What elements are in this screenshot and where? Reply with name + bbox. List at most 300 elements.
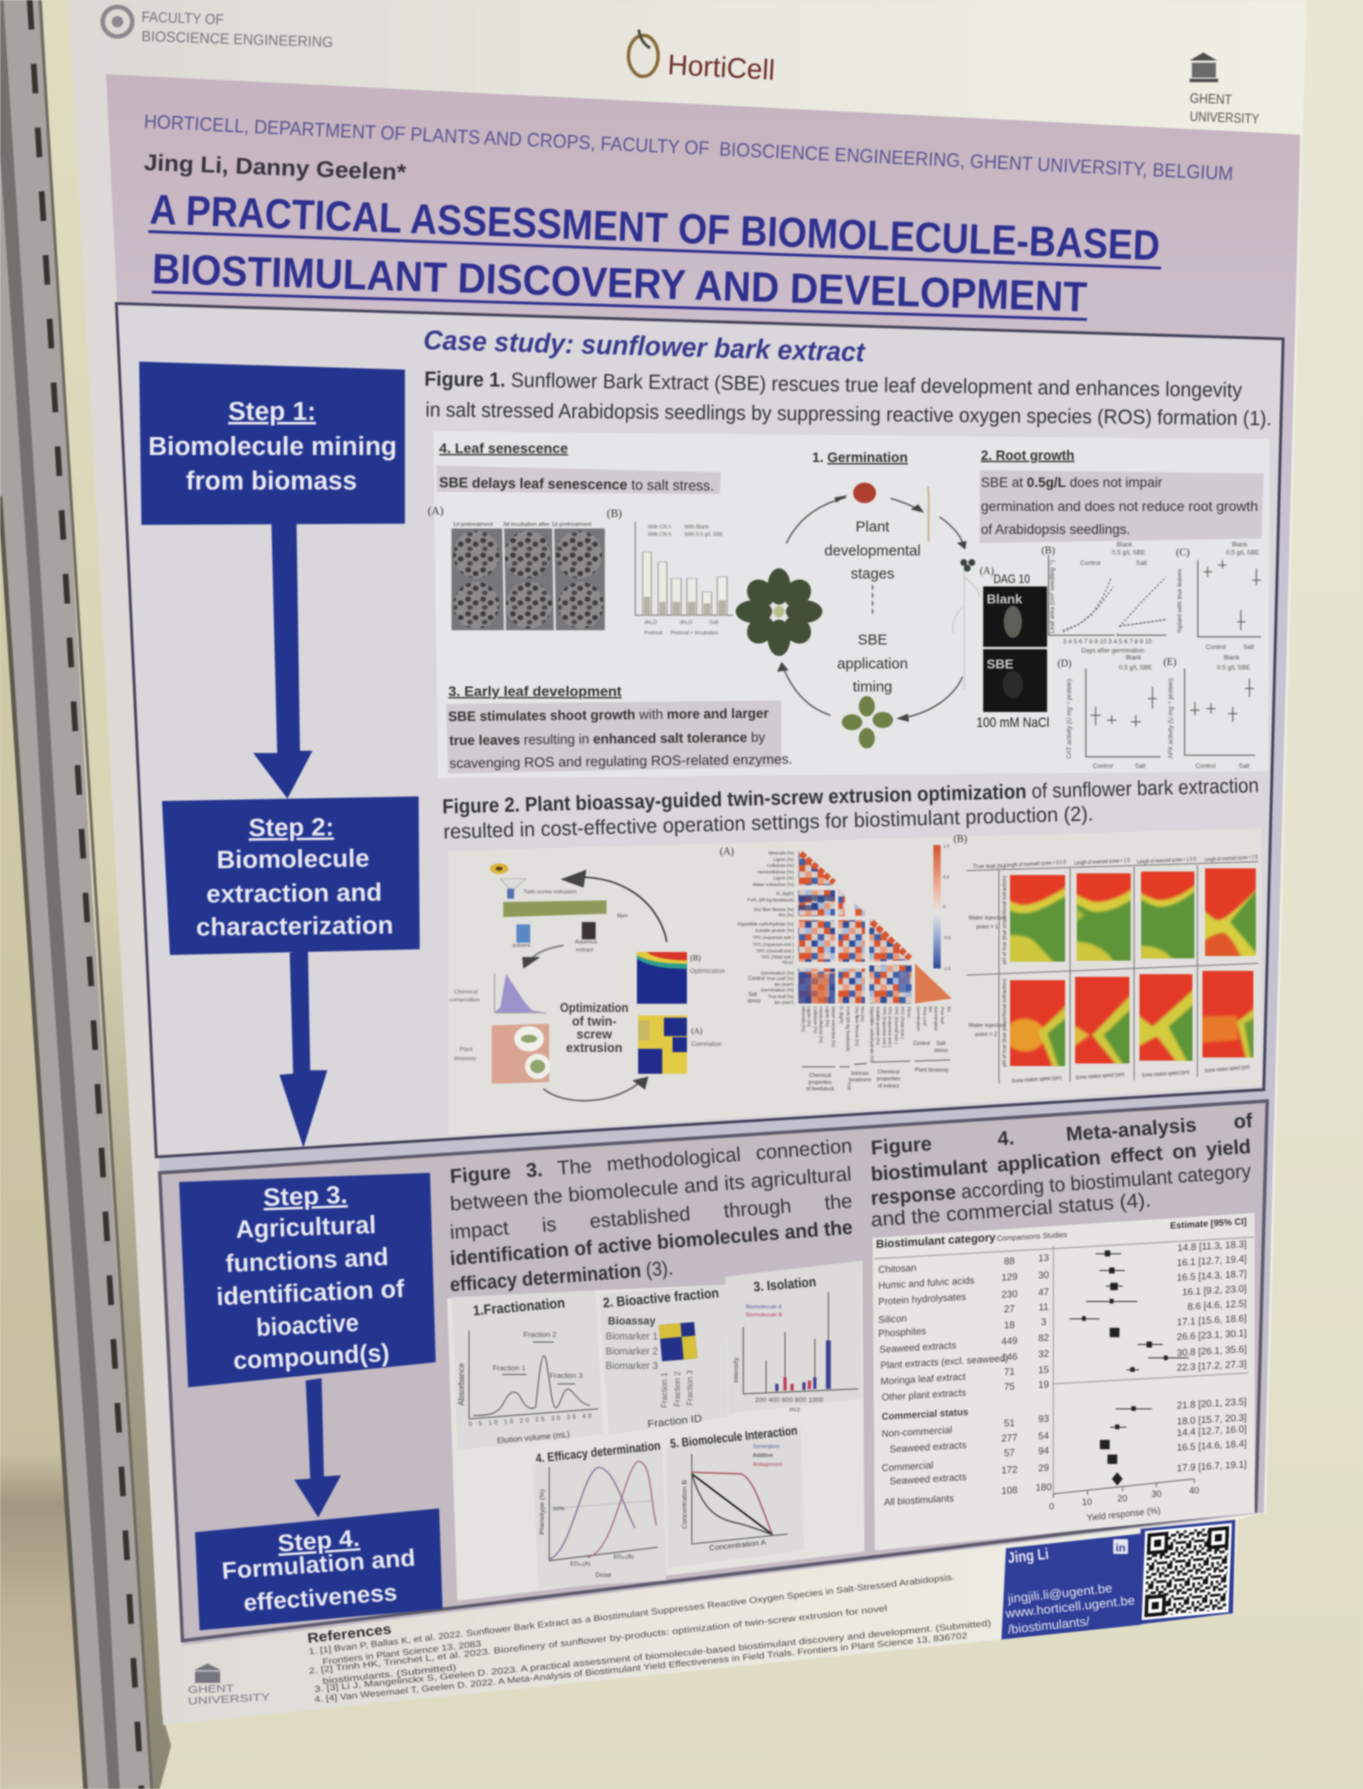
- chart: response surface heatmaps: Length of reversed screw = 1.5 D: [1137, 857, 1196, 866]
- column labels: TFC (Total extr.): [900, 1006, 905, 1039]
- card 3: isolation: Biomolecule B: [746, 1313, 782, 1319]
- column labels: FVR (t/h kg feedstock): [845, 1006, 850, 1052]
- cycle arrows: [777, 487, 980, 722]
- poster stand metal bar: [0, 0, 171, 1789]
- studies column: 29: [1038, 1463, 1049, 1474]
- figure 1 caption: [424, 368, 1272, 430]
- estimates column: 16.1 [12.7, 19.4]: [1177, 1254, 1247, 1269]
- section 2: root growth: 0.5 g/L SBE: [1112, 549, 1145, 556]
- section 4: leaf senescence: SBE delays leaf senescence to salt stress.: [439, 475, 714, 495]
- column labels: TPC (Aqueous extr.): [882, 1006, 887, 1048]
- section 2: root growth: Control: [1080, 560, 1100, 567]
- figure 4 caption: [870, 1110, 1254, 1232]
- card 1: fractionation: Fraction 2: [524, 1330, 556, 1339]
- title: BIOSTIMULANT DISCOVERY AND DEVELOPMENT: [151, 245, 1088, 321]
- card 5: biomolecule interaction: Additive: [753, 1453, 773, 1459]
- section 2: root growth: CAT activity (U mg⁻¹ protein): [1066, 679, 1073, 759]
- section 4: leaf senescence: Blank: [518, 529, 532, 535]
- card 2: bioactive fraction: Fraction ID: [647, 1414, 703, 1430]
- row labels: Digestible carbohydrate (%): [738, 921, 794, 926]
- logo: Faculty of Bioscience Engineering: [103, 7, 333, 51]
- section 4: leaf senescence: 100 mM NaCl: [559, 529, 594, 535]
- category names: Silicon: [878, 1313, 907, 1326]
- chart: correlation matrix: -0.5: [943, 935, 951, 940]
- twin-screw extrusion diagram: bioassay: [454, 1056, 477, 1062]
- step 2 box: Step 2:: [248, 813, 334, 842]
- section 2: root growth: 0.5 g/L SBE: [1226, 549, 1259, 556]
- chart: response surface heatmaps: point = 2: [975, 1032, 997, 1038]
- footer logo: Ghent University: [188, 1663, 271, 1708]
- contact box: [1001, 1533, 1143, 1640]
- figure 4 caption: biostimulant application effect on yield: [870, 1136, 1252, 1186]
- step 4 box: effectiveness: [243, 1579, 398, 1617]
- chart: response surface heatmaps: Length of reversed screw = 0.5 D: [1005, 860, 1066, 869]
- studies column: 54: [1038, 1431, 1050, 1442]
- studies column: 93: [1038, 1414, 1049, 1425]
- footer logo: Ghent University: UNIVERSITY: [188, 1692, 271, 1708]
- references: References: [307, 1621, 393, 1646]
- category names: Chitosan: [878, 1263, 916, 1276]
- section 2: root growth: Blank: [1224, 654, 1240, 661]
- frame lines: [967, 862, 1258, 1083]
- chart: correlation matrix: 0: [943, 904, 946, 909]
- row labels: Germination (%): [761, 987, 794, 992]
- studies column: 82: [1038, 1333, 1049, 1344]
- row labels: BA (mm²): [775, 1000, 794, 1005]
- comparisons column: 75: [1004, 1381, 1015, 1393]
- step 3 box: Step 3.: [263, 1181, 348, 1212]
- step 3 box: functions and: [225, 1243, 389, 1278]
- card 3: isolation: m/z: [789, 1406, 801, 1413]
- column labels: Germination: [934, 1006, 939, 1032]
- center: plant developmental cycle: 1. Germination: [812, 450, 908, 465]
- chart: correlation matrix: Control: [913, 1041, 930, 1047]
- section 2: root growth: SBE at 0.5g/L does not impair: [981, 475, 1163, 490]
- section 4: leaf senescence: (A): [428, 506, 444, 518]
- row labels: TFC (Total extr.): [761, 954, 794, 959]
- chart: correlation matrix: 1.0: [943, 844, 950, 849]
- chart: response surface heatmaps: Length of reversed screw = 2 D: [1204, 855, 1258, 863]
- section 2: root growth: 0.5 g/L SBE: [1217, 665, 1250, 672]
- twin-screw extrusion diagram: [449, 863, 725, 1101]
- figure 4 caption: and the commercial status (4).: [870, 1189, 1152, 1232]
- twin-screw extrusion diagram: Correlation: [691, 1041, 722, 1048]
- estimates column: 16.1 [9.2, 23.0]: [1182, 1284, 1247, 1298]
- category names: Seaweed extracts: [890, 1472, 967, 1487]
- column labels: Hemicellulose (%): [819, 1006, 824, 1043]
- references: 2. [2] Trinh HK, Trinchet L, et al. 2023. Biorefinery of sunflower by-products: optimization of twin-screw extrusion for novel: [308, 1603, 888, 1676]
- section 3: early leaf development: true leaves resulting in enhanced salt tolerance by: [449, 730, 765, 748]
- center: plant developmental cycle: SBE: [858, 633, 887, 649]
- column labels: Soluble protein (%): [876, 1006, 881, 1045]
- bar chart: CAT activity: [635, 522, 733, 615]
- section 4: leaf senescence: 3d incubation after 1d pretreatment: [503, 522, 592, 528]
- category names: Seaweed extracts: [879, 1340, 956, 1356]
- chart: response surface heatmaps: Screw rotation speed (rpm): [1141, 1070, 1190, 1079]
- estimates column: 26.6 [23.1, 30.1]: [1177, 1328, 1247, 1343]
- row labels: Lignin (%): [773, 876, 794, 881]
- chart: response surface heatmaps: Water injection: [968, 1023, 1006, 1029]
- column labels: Rm (%): [860, 1006, 865, 1022]
- estimates column: 18.0 [15.7, 20.3]: [1177, 1413, 1247, 1428]
- section 2: root growth: 3 4 5 6 7 8 9 10 3 4 5 6 7 8 9 10: [1063, 638, 1152, 645]
- step 3 box: Agricultural: [235, 1211, 377, 1244]
- card 1: fractionation: Absorbance: [457, 1363, 466, 1406]
- cards: [452, 1261, 861, 1588]
- section 2: root growth: 100 mM NaCl: [976, 715, 1049, 730]
- chart: response surface heatmaps: Water injection: [968, 916, 1006, 922]
- icon: LinkedIn: in: [1115, 1543, 1126, 1555]
- photo panels: blank and SBE: Blank: [987, 592, 1023, 607]
- twin-screw extrusion diagram: fiber: [617, 913, 628, 919]
- section 2: root growth: DAG 10: [993, 572, 1030, 586]
- header logos: [103, 7, 1260, 126]
- section 2: root growth: (E): [1163, 657, 1176, 668]
- chart: correlation matrix: [720, 844, 952, 1093]
- chart: correlation matrix: of extract: [878, 1083, 900, 1089]
- category names: Plant extracts (excl. seaweed): [881, 1353, 1008, 1372]
- twin-screw extrusion diagram: composition: [449, 998, 480, 1004]
- figure 4 panel: forest plot: [873, 1213, 1255, 1551]
- photo grid of seedlings: [452, 528, 605, 630]
- figure 3 caption: efficacy determination (3).: [449, 1257, 674, 1297]
- references: 3. [3] Li J, Mangelinckx S, Geelen D. 2023. A practical assessment of biomolecule-based biostimulant discovery and development. (Submitted): [314, 1618, 992, 1694]
- card 5: biomolecule interaction: Concentration B: [682, 1479, 689, 1529]
- section 4: leaf senescence: dH₂O: [644, 620, 657, 626]
- step 2 box: characterization: [196, 912, 394, 942]
- references: Frontiers in Plant Science 13, 2083: [322, 1638, 482, 1667]
- card 5: biomolecule interaction: Antagonism: [753, 1462, 783, 1468]
- comparisons column: 230: [1001, 1289, 1018, 1301]
- photo panels: blank and SBE: SBE: [987, 657, 1014, 672]
- card 2: bioactive fraction: Biomarker 1: [606, 1331, 658, 1342]
- twin-screw extrusion diagram: Optimization: [690, 968, 725, 975]
- chart: correlation matrix: stress: [934, 1048, 948, 1054]
- comparisons column: 449: [1001, 1336, 1017, 1348]
- twin-screw extrusion diagram: solvent: [512, 943, 531, 949]
- center: plant developmental cycle: [736, 450, 980, 748]
- seedling: [927, 487, 930, 542]
- comparisons column: 146: [1001, 1352, 1017, 1364]
- category names: Commercial status: [882, 1407, 968, 1423]
- chart: response surface heatmaps: pH of true (true proportional extraction): [1002, 978, 1008, 1067]
- card 2: bioactive fraction: Fraction 3: [685, 1370, 694, 1406]
- card 5: biomolecule interaction: Concentration A: [709, 1538, 766, 1553]
- figure 2 caption: [442, 774, 1259, 844]
- center: plant developmental cycle: developmental: [824, 544, 921, 560]
- mauve poster background: [106, 74, 1300, 1645]
- estimates column: 21.8 [20.1, 23.5]: [1177, 1397, 1247, 1412]
- column labels: Water extractive (%): [831, 1006, 836, 1048]
- card 3: isolation: 200 400 600 800 1000: [755, 1397, 824, 1404]
- card 1: fractionation: 0 5 10 15 20 25 30 35 40: [468, 1413, 592, 1428]
- section 3: early leaf development: 3. Early leaf development: [448, 684, 622, 699]
- axis labels: 30: [1151, 1489, 1162, 1499]
- section 2: root growth: of Arabidopsis seedlings.: [981, 522, 1130, 537]
- twin-screw extrusion diagram: of twin-: [572, 1015, 617, 1029]
- figure 2 caption: resulted in cost-effective operation settings for biostimulant production (2).: [443, 802, 1094, 844]
- category names: [878, 1257, 1008, 1509]
- studies column: 3: [1041, 1317, 1046, 1328]
- case study heading: Case study: sunflower bark extract: [423, 324, 867, 368]
- twin-screw extrusion diagram: Twin-screw extrusion: [524, 889, 577, 895]
- affiliation: HORTICELL, DEPARTMENT OF PLANTS AND CROPS, FACULTY OF BIOSCIENCE ENGINEERING, GHENT UNIVERSITY, BELGIUM: [143, 111, 1234, 185]
- row labels: TEAC: [782, 960, 795, 965]
- studies column: 30: [1038, 1270, 1050, 1282]
- forest plot table: Estimate [95% CI]: [1170, 1216, 1247, 1231]
- step 1 box: from biomass: [186, 465, 357, 495]
- chart: response surface heatmaps: pH of true (true proportional extraction): [1002, 875, 1008, 964]
- estimates column: 16.5 [14.3, 18.7]: [1177, 1269, 1247, 1284]
- chart: correlation matrix: Salt: [748, 992, 758, 998]
- studies column: 15: [1038, 1365, 1049, 1376]
- logo: Ghent University: [1190, 52, 1260, 126]
- chart: response surface heatmaps: True leaf (%): [973, 864, 1006, 870]
- estimates column: [1177, 1239, 1247, 1474]
- section 4: leaf senescence: With CN h: [648, 532, 671, 538]
- axis labels: 20: [1117, 1493, 1127, 1503]
- section 4: leaf senescence: With Blank: [684, 524, 709, 530]
- card 4: efficacy determination: Phenotype (%): [539, 1489, 546, 1535]
- step 3 box: compound(s): [233, 1339, 390, 1375]
- twin-screw extrusion diagram: screw: [576, 1027, 612, 1041]
- section 2: root growth: Blank: [1117, 542, 1133, 549]
- figure 2 caption: Figure 2. Plant bioassay-guided twin-screw extrusion optimization of sunflower bark extraction: [442, 774, 1259, 818]
- section 4: leaf senescence: Salt: [709, 620, 719, 626]
- section 2: root growth: germination and does not reduce root growth: [981, 499, 1258, 514]
- section 4: leaf senescence: dH₂O: [680, 620, 692, 626]
- row labels: Lignin (%): [773, 857, 794, 862]
- card 5: biomolecule interaction: Synergism: [753, 1444, 780, 1450]
- card 5: biomolecule interaction: [670, 1424, 798, 1553]
- group brackets: [802, 1060, 950, 1067]
- chart: correlation matrix: treatment: [849, 1078, 872, 1084]
- twin-screw extrusion diagram: extrusion: [566, 1041, 622, 1055]
- row labels: Hemicellulose (%): [757, 869, 794, 874]
- charts: growth and enzyme activity: [1049, 555, 1261, 757]
- comparisons column: 277: [1001, 1433, 1017, 1445]
- row labels: TFC (Aqueous extr.): [753, 942, 794, 947]
- step 3 box: identification of: [216, 1275, 406, 1311]
- footer logo: Ghent University: GHENT: [188, 1684, 235, 1696]
- section 4: leaf senescence: With 0.5 g/L SBE: [684, 532, 724, 538]
- step 2 box: Biomolecule: [216, 845, 370, 874]
- chart: correlation matrix: properties: [808, 1080, 832, 1086]
- section 2: root growth: Days after germination: [1081, 648, 1145, 655]
- chart: response surface heatmaps: [954, 834, 1263, 1085]
- chart: correlation matrix: Plant bioassay: [915, 1067, 949, 1073]
- logo: Faculty of Bioscience Engineering: BIOSCIENCE ENGINEERING: [141, 29, 333, 51]
- icon: small seedling: [960, 559, 975, 572]
- studies column: 32: [1038, 1349, 1049, 1360]
- section 2: root growth: (B): [1041, 545, 1055, 556]
- figure 3 caption: between the biomolecule and its agricultural: [449, 1163, 852, 1216]
- heatmap: correlation: [638, 1015, 687, 1074]
- category names: Other plant extracts: [882, 1388, 966, 1404]
- icon: LinkedIn: [1113, 1539, 1128, 1555]
- step 1 box: Biomolecule mining: [148, 431, 397, 461]
- estimates column: 8.6 [4.6, 12.5]: [1187, 1298, 1247, 1313]
- section 4: leaf senescence: (B): [607, 508, 622, 520]
- section 2: root growth: (A): [980, 566, 994, 577]
- chart: correlation matrix: properties: [877, 1076, 901, 1082]
- heatmap row 2: [1009, 979, 1066, 1068]
- section 4: leaf senescence: Pretreat: [644, 630, 663, 636]
- estimates column: 16.5 [14.6, 18.4]: [1177, 1439, 1247, 1454]
- arrow: step 1 to step 2: [253, 524, 313, 799]
- section 2: root growth: Salt: [1136, 560, 1147, 567]
- chart: correlation matrix: stress: [747, 998, 761, 1004]
- card 4: efficacy determination: [535, 1439, 661, 1579]
- forest plot table: Biostimulant category: [876, 1232, 996, 1251]
- icon: red seed: [853, 483, 876, 503]
- section 2: root growth: Salt: [1135, 763, 1146, 770]
- chart: correlation matrix: of feedstock: [806, 1087, 835, 1093]
- card 3: isolation: Intensity: [733, 1357, 740, 1383]
- plant bioassay triangle: [915, 963, 952, 1003]
- row labels: [738, 851, 795, 1005]
- section 3: early leaf development: [448, 684, 793, 771]
- arrow: step 2 to step 3: [279, 950, 327, 1148]
- step 3 box: [179, 1173, 436, 1387]
- card 1: fractionation: Fraction 3: [550, 1371, 583, 1380]
- card 2: bioactive fraction: Biomarker 2: [606, 1346, 658, 1357]
- row labels: D, (kg/h): [776, 891, 794, 896]
- category names: Non-commercial: [882, 1425, 952, 1440]
- heatmap: [659, 1322, 697, 1361]
- section 2: root growth: (D): [1057, 658, 1072, 669]
- step 4 box: Formulation and: [221, 1545, 416, 1585]
- figure 4 caption: Meta-analysis: [1065, 1114, 1197, 1146]
- chart: response surface heatmaps: Length of reversed screw = 1 D: [1074, 858, 1130, 867]
- card 2: bioactive fraction: Biomarker 3: [606, 1361, 658, 1372]
- row labels: Dry fiber fitness (%): [754, 907, 794, 912]
- card 4: efficacy determination: ED₅₀(B): [614, 1555, 634, 1561]
- forest plot marks: [874, 1237, 1254, 1498]
- column labels: Lignin (%): [825, 1006, 830, 1027]
- twin-screw extrusion diagram: Chemical: [454, 990, 478, 996]
- panel: steps 3-4 frame: [160, 1101, 1267, 1641]
- chart: correlation matrix: Control: [748, 976, 765, 982]
- studies column: [1036, 1253, 1052, 1494]
- chart: correlation matrix: Chemical: [809, 1073, 831, 1079]
- row labels: True leaf (%): [768, 994, 794, 999]
- axis labels: 10: [1082, 1497, 1092, 1507]
- section 2: root growth: 2. Root growth: [981, 448, 1074, 463]
- figure 1 panel: [428, 431, 1269, 778]
- comparisons column: 71: [1004, 1367, 1015, 1378]
- title: A PRACTICAL ASSESSMENT OF BIOMOLECULE-BASED: [149, 186, 1161, 269]
- references: biostimulants. (Submitted): [322, 1662, 457, 1686]
- card 5: biomolecule interaction: 5. Biomolecule Interaction: [670, 1424, 798, 1451]
- column labels: TPC (Overall extr.): [894, 1006, 899, 1044]
- contact box: www.horticell.ugent.be: [1004, 1593, 1136, 1621]
- grey highlight boxes: [437, 466, 1264, 774]
- row labels: Cellulose (%): [767, 863, 794, 868]
- contact box: Jing Li: [1007, 1546, 1050, 1567]
- chart: correlation matrix: Intrinsic: [851, 1071, 869, 1077]
- column labels: True leaf: [940, 1006, 945, 1025]
- step 2 box: [162, 796, 420, 955]
- section 2: root growth: Blank: [1126, 654, 1142, 661]
- chart: response surface heatmaps: point = 1: [976, 925, 998, 931]
- section 4: leaf senescence: Pretreat + Incubation: [671, 630, 719, 636]
- section 2: root growth: Control: [1093, 763, 1113, 770]
- chart: correlation matrix: Salt: [936, 1041, 946, 1047]
- section 4: leaf senescence: 1d pretreatment: [453, 522, 493, 528]
- twin-screw extrusion diagram: extract: [576, 948, 593, 954]
- section 2: root growth: Control: [1206, 644, 1226, 651]
- center: plant developmental cycle: application: [837, 657, 908, 673]
- column labels: Lignin (%): [807, 1006, 812, 1027]
- section 3: early leaf development: SBE stimulates shoot growth with more and larger: [448, 706, 769, 724]
- section 2: root growth: (C): [1176, 548, 1190, 559]
- column labels: [801, 1006, 951, 1063]
- chart: correlation matrix: Chemical: [878, 1070, 899, 1076]
- heatmap row 1: [1009, 874, 1066, 963]
- references: [307, 1572, 992, 1704]
- arrow: step 3 to step 4: [294, 1378, 341, 1517]
- card 4: efficacy determination: 4. Efficacy determination: [535, 1439, 661, 1466]
- card 1: fractionation: Elution volume (mL): [497, 1430, 571, 1445]
- section 2: root growth: [976, 448, 1261, 770]
- studies column: 180: [1036, 1482, 1052, 1494]
- estimates column: 14.4 [12.7, 16.0]: [1177, 1424, 1247, 1439]
- row labels: Water extractive (%): [753, 882, 794, 887]
- column labels: Cellulose (%): [813, 1006, 818, 1034]
- card 4: efficacy determination: Dose: [595, 1572, 612, 1579]
- comparisons column: 88: [1004, 1256, 1015, 1268]
- QR code: [1137, 1520, 1235, 1625]
- estimates column: 14.8 [11.3, 18.3]: [1177, 1239, 1247, 1254]
- forest plot table: Comparisons Studies: [997, 1230, 1067, 1243]
- step 1 box: [139, 362, 405, 525]
- card 2: bioactive fraction: Bioassay: [608, 1316, 655, 1328]
- center: plant developmental cycle: timing: [853, 679, 892, 695]
- row labels: Rm (%): [778, 913, 794, 918]
- studies column: 94: [1038, 1446, 1050, 1457]
- figure 3 caption: Figure 3. The methodological connection: [449, 1135, 853, 1188]
- category names: All biostimulants: [884, 1493, 954, 1508]
- strong blue and orange columns: [798, 973, 811, 1003]
- row labels: TPC (Overall extr.): [756, 949, 794, 954]
- column labels: TEAC: [906, 1006, 911, 1019]
- heatmap: optimization: [637, 952, 687, 1004]
- section 2: root growth: APX activity (U mg⁻¹ protein): [1168, 678, 1175, 759]
- axis labels: 40: [1189, 1485, 1199, 1495]
- chart: correlation matrix: TSE: [846, 1082, 851, 1091]
- axis labels: Yield response (%): [1086, 1505, 1161, 1523]
- logo: HortiCell: HortiCell: [667, 49, 776, 87]
- panel: steps 1-2 frame: [116, 303, 1283, 1157]
- figure 3 caption: [449, 1135, 853, 1297]
- diagonal cells: [801, 853, 910, 958]
- comparisons column: 108: [1001, 1485, 1017, 1497]
- section 4: leaf senescence: 4. Leaf senescence: [439, 441, 568, 456]
- studies column: 19: [1038, 1379, 1049, 1391]
- twin-screw extrusion diagram: Plant: [460, 1047, 473, 1053]
- row labels: TPC (Aqueous extr.): [753, 935, 794, 940]
- card 4: efficacy determination: 50%: [553, 1507, 565, 1513]
- photo panels: blank and SBE: [983, 586, 1047, 712]
- section 2: root growth: Salt: [1239, 763, 1250, 770]
- section 2: root growth: Blank: [1232, 542, 1248, 549]
- card 1: fractionation: 1.Fractionation: [472, 1295, 566, 1319]
- category names: Commercial: [882, 1460, 933, 1474]
- category names: Protein hydrolysates: [878, 1292, 966, 1308]
- contact box: /biostimulants/: [1007, 1614, 1091, 1637]
- roots: [953, 569, 980, 690]
